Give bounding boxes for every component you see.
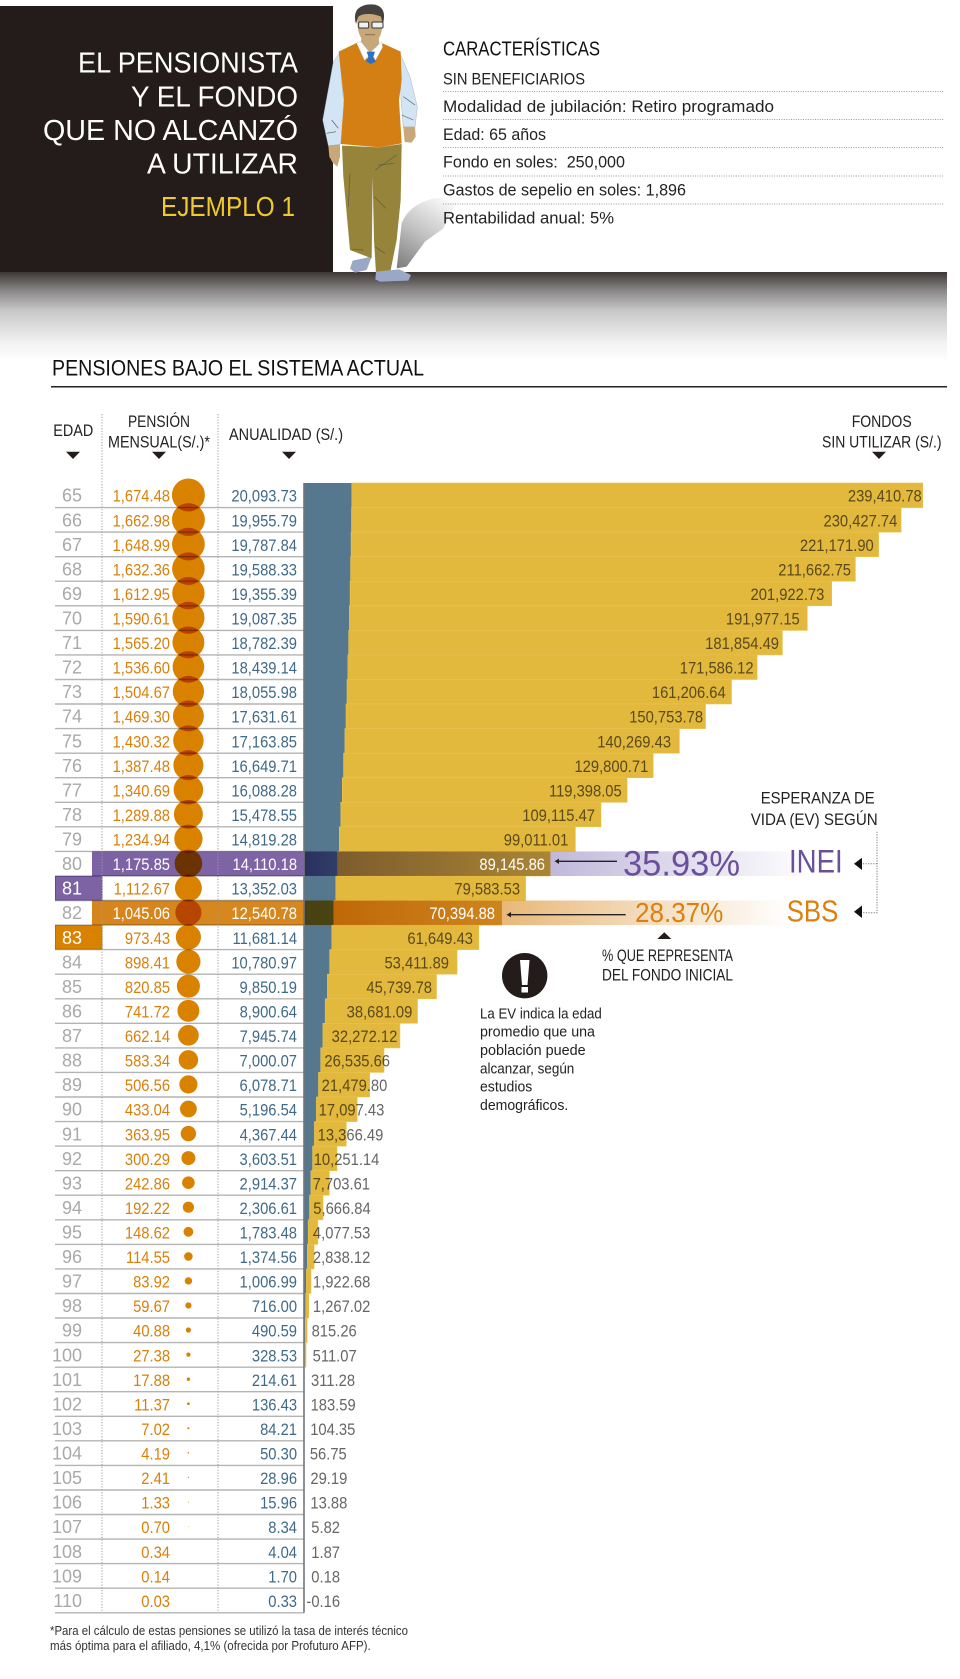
callout: SBS	[506, 894, 862, 929]
column: pensión mensual: 27.38	[133, 1348, 170, 1366]
column: pensión mensual: 1,674.48	[113, 488, 170, 506]
column: pensión mensual: 1,565.20	[113, 635, 170, 653]
column: edad: 86	[62, 1002, 82, 1022]
column: anualidad: 13,352.03	[231, 881, 297, 899]
icon: left triangle INEI	[854, 858, 862, 870]
column: edad: 100	[52, 1345, 82, 1365]
note: percent of initial fund: % QUE REPRESENTA	[602, 947, 733, 965]
column: fondos sin utilizar: 61,649.43	[407, 930, 473, 948]
column: edad: 94	[62, 1198, 82, 1218]
column: fondos sin utilizar: 89,145.86	[479, 856, 545, 874]
column: fondos sin utilizar: 32,272.12	[332, 1028, 397, 1046]
column: anualidad: 2,914.37	[240, 1176, 297, 1194]
column: anualidad: 19,787.84	[231, 537, 297, 555]
label: INEI: INEI	[789, 844, 843, 880]
column: edad: 66	[62, 510, 82, 530]
heading: title line 4: A UTILIZAR	[147, 148, 298, 180]
text: life expectancy note: promedio que una	[480, 1025, 596, 1041]
column: fondos sin utilizar: 5,666.84	[313, 1200, 371, 1218]
column: fondos sin utilizar: 4,077.53	[313, 1225, 371, 1243]
column: fondos sin utilizar: 29.19	[310, 1470, 347, 1488]
text: modalidad: Modalidad de jubilación: Retiro programado	[443, 97, 774, 116]
column: edad: 72	[62, 658, 82, 678]
column: anualidad: 14,110.18	[233, 856, 297, 874]
text: life expectancy note: población puede	[480, 1043, 586, 1059]
header: fondos sin utilizar	[822, 413, 942, 459]
column: fondos sin utilizar: 99,011.01	[504, 832, 568, 850]
column: fondos sin utilizar: 239,410.78	[848, 488, 922, 506]
bars: anualidad (blue)	[304, 483, 352, 1392]
column: pensión mensual: 192.22	[125, 1200, 170, 1218]
column: fondos sin utilizar: 38,681.09	[347, 1004, 412, 1022]
column: fondos sin utilizar: 183.59	[311, 1397, 356, 1415]
column: anualidad: 84.21	[260, 1421, 297, 1439]
column: fondos sin utilizar: -0.16	[306, 1593, 340, 1611]
illustration: pensioner	[323, 4, 467, 282]
column: edad: 108	[52, 1542, 82, 1562]
column: fondos sin utilizar: 13.88	[310, 1495, 348, 1513]
column: edad: 103	[52, 1419, 82, 1439]
table column headers	[53, 412, 942, 459]
column: anualidad: 15.96	[260, 1495, 297, 1513]
column: fondos sin utilizar: 211,662.75	[778, 562, 851, 580]
column: pensión mensual: 7.02	[141, 1421, 170, 1439]
label: SBS: SBS	[787, 894, 838, 929]
column: fondos sin utilizar: 56.75	[310, 1446, 347, 1464]
column: anualidad: 7,945.74	[240, 1028, 297, 1046]
column: fondos sin utilizar: 109,115.47	[522, 807, 595, 825]
column: fondos sin utilizar	[306, 488, 922, 1611]
column: anualidad: 9,850.19	[240, 979, 297, 997]
column: anualidad: 716.00	[252, 1299, 297, 1316]
text: gastos: Gastos de sepelio en soles: 1,896	[443, 181, 686, 200]
column: edad: 110	[53, 1591, 82, 1611]
column: edad: 79	[62, 830, 82, 850]
column: edad: 75	[62, 731, 82, 751]
column: anualidad: 19,955.79	[231, 513, 297, 531]
highlight box: age 83	[56, 926, 102, 949]
percentage: 28.37%: 28.37%	[635, 897, 723, 928]
column: fondos sin utilizar: 2,838.12	[313, 1249, 370, 1267]
column: edad: 96	[62, 1247, 82, 1267]
column: fondos sin utilizar: 79,583.53	[454, 881, 520, 899]
column: fondos sin utilizar: 129,800.71	[574, 758, 648, 776]
header: fondos sin utilizar: FONDOS	[852, 413, 912, 431]
column: edad: 73	[62, 682, 82, 702]
column: fondos sin utilizar: 815.26	[312, 1323, 357, 1341]
column: fondos sin utilizar: 201,922.73	[751, 586, 825, 604]
column: pensión mensual: 59.67	[133, 1299, 170, 1316]
column: edad	[52, 486, 82, 1611]
column: edad: 80	[62, 854, 82, 874]
column: pensión mensual: 1,112.67	[114, 881, 170, 899]
icon: left triangle SBS	[854, 906, 862, 918]
column: fondos sin utilizar: 104.35	[310, 1421, 356, 1439]
text: life expectancy note: alcanzar, según	[480, 1061, 574, 1077]
column: anualidad: 18,782.39	[231, 635, 297, 653]
column: anualidad: 328.53	[252, 1348, 297, 1366]
column: pensión mensual: 1,387.48	[113, 758, 170, 776]
column: anualidad: 16,088.28	[231, 783, 297, 801]
column: pensión mensual: 820.85	[125, 979, 170, 997]
highlight band: SBS row 82	[92, 900, 790, 925]
column: pensión mensual: 506.56	[125, 1077, 170, 1095]
text: fondo: Fondo en soles: 250,000	[443, 153, 625, 172]
column: pensión mensual: 1,469.30	[113, 709, 170, 727]
column: pensión mensual: 1.33	[141, 1495, 170, 1513]
column: pensión mensual	[113, 488, 170, 1611]
highlight box: age 81	[56, 876, 102, 900]
panel: characteristics	[443, 38, 944, 227]
text: life expectancy note: demográficos.	[480, 1098, 568, 1114]
column: pensión mensual: 363.95	[125, 1127, 170, 1145]
column: fondos sin utilizar: 161,206.64	[652, 685, 726, 702]
bars: fondos sin utilizar (yellow)	[305, 483, 923, 1367]
column: edad: 107	[52, 1517, 82, 1537]
column: pensión mensual: 973.43	[125, 930, 170, 948]
column: anualidad: 18,439.14	[231, 660, 297, 678]
callout: INEI	[554, 844, 862, 883]
column: pensión mensual: 4.19	[141, 1446, 170, 1464]
callout: esperanza de vida heading: ESPERANZA DE	[761, 788, 875, 807]
heading: pensiones bajo el sistema actual: PENSIONES BAJO EL SISTEMA ACTUAL	[52, 356, 424, 381]
column: edad: 92	[62, 1149, 82, 1169]
callout: esperanza de vida heading: VIDA (EV) SEGÚN	[751, 810, 878, 829]
column: anualidad: 136.43	[252, 1397, 297, 1415]
column: pension bubbles	[172, 478, 205, 1527]
highlight band: INEI row 80	[92, 851, 813, 876]
column: fondos sin utilizar: 17,097.43	[319, 1102, 385, 1120]
footnote	[50, 1624, 408, 1653]
column: edad: 87	[62, 1026, 82, 1046]
column: anualidad: 5,196.54	[240, 1102, 297, 1120]
column: pensión mensual: 741.72	[125, 1004, 170, 1022]
column: edad: 68	[62, 559, 82, 579]
column: anualidad: 15,478.55	[231, 807, 297, 825]
column: edad: 97	[62, 1272, 82, 1292]
header: pensión mensual: PENSIÓN	[128, 412, 190, 431]
column: pensión mensual: 0.34	[141, 1544, 170, 1562]
column: edad: 76	[62, 756, 82, 776]
column: fondos sin utilizar: 511.07	[313, 1348, 357, 1366]
column: pensión mensual: 1,175.85	[113, 856, 170, 874]
column: pensión mensual: 1,430.32	[113, 734, 170, 752]
column: anualidad: 6,078.71	[240, 1077, 297, 1095]
column: edad: 98	[62, 1296, 82, 1316]
column: pensión mensual: 0.03	[141, 1593, 170, 1611]
column: pensión mensual: 1,632.36	[113, 562, 170, 580]
column: anualidad: 19,588.33	[231, 562, 297, 580]
panel: title	[0, 6, 333, 272]
column: pensión mensual: 242.86	[125, 1176, 170, 1194]
column: pensión mensual: 1,590.61	[113, 611, 170, 629]
column: fondos sin utilizar: 171,586.12	[680, 660, 754, 678]
column: fondos sin utilizar: 45,739.78	[366, 979, 432, 997]
column: edad: 101	[52, 1370, 82, 1390]
column: pensión mensual: 662.14	[125, 1028, 170, 1046]
column: fondos sin utilizar: 191,977.15	[726, 611, 800, 629]
column: fondos sin utilizar: 1.87	[311, 1544, 340, 1562]
column: fondos sin utilizar: 221,171.90	[800, 537, 874, 555]
column: fondos sin utilizar: 150,753.78	[629, 709, 703, 727]
column: anualidad: 17,163.85	[231, 734, 297, 752]
column: edad: 67	[62, 535, 82, 555]
column: anualidad: 1.70	[268, 1569, 297, 1587]
column: edad: 71	[62, 633, 82, 653]
column: pensión mensual: 0.14	[141, 1569, 170, 1587]
column: edad: 65	[62, 486, 82, 506]
column: anualidad: 2,306.61	[240, 1200, 297, 1218]
column: edad: 99	[62, 1321, 82, 1341]
column: anualidad: 14,819.28	[231, 832, 297, 850]
column: pensión mensual: 1,234.94	[113, 832, 170, 850]
column: fondos sin utilizar: 1,267.02	[313, 1299, 370, 1316]
column: anualidad: 4.04	[268, 1544, 297, 1562]
chart: stacked bars annuity and unused funds	[304, 483, 923, 1392]
column: fondos sin utilizar: 70,394.88	[429, 906, 495, 923]
column: edad: 89	[62, 1075, 82, 1095]
column: edad: 85	[62, 977, 82, 997]
column: pensión mensual: 0.70	[141, 1520, 170, 1537]
column: anualidad: 19,087.35	[231, 611, 297, 629]
column: fondos sin utilizar: 311.28	[311, 1372, 355, 1390]
column: edad: 106	[52, 1493, 82, 1513]
column: edad: 83	[62, 928, 82, 948]
footnote: *Para el cálculo de estas pensiones se utilizó la tasa de interés técnico	[50, 1624, 408, 1638]
column: anualidad: 17,631.61	[231, 709, 297, 727]
gradient floor band	[0, 272, 947, 362]
callout: esperanza de vida heading	[751, 788, 878, 829]
column: pensión mensual: 1,289.88	[113, 807, 170, 825]
column: pensión mensual: 40.88	[133, 1323, 170, 1341]
column: pensión mensual: 148.62	[125, 1225, 170, 1243]
column: anualidad: 0.33	[268, 1593, 297, 1611]
column: pensión mensual: 114.55	[126, 1249, 170, 1267]
text: life expectancy note: La EV indica la edad	[480, 1006, 602, 1022]
column: edad: 74	[62, 707, 82, 727]
column: fondos sin utilizar: 10,251.14	[314, 1151, 380, 1169]
note: percent of initial fund	[602, 932, 733, 985]
column: pensión mensual: 83.92	[133, 1274, 170, 1292]
text: rentabilidad: Rentabilidad anual: 5%	[443, 208, 614, 227]
footnote: más óptima para el afiliado, 4,1% (ofrecida por Profuturo AFP).	[50, 1639, 371, 1653]
column: anualidad	[231, 488, 297, 1611]
column: edad: 102	[52, 1394, 82, 1414]
column: fondos sin utilizar: 53,411.89	[384, 955, 449, 973]
column: anualidad: 1,006.99	[240, 1274, 297, 1292]
header: pensión mensual	[108, 412, 210, 459]
column: pensión mensual: 583.34	[125, 1053, 170, 1071]
percentage: 35.93%: 35.93%	[623, 844, 740, 883]
column: edad: 70	[62, 608, 82, 628]
column: edad: 104	[52, 1444, 82, 1464]
column: fondos sin utilizar: 0.18	[311, 1569, 340, 1587]
column: pensión mensual: 300.29	[125, 1151, 170, 1169]
column: anualidad: 18,055.98	[231, 685, 297, 702]
column: edad: 84	[62, 952, 82, 972]
column: fondos sin utilizar: 26,535.66	[324, 1053, 390, 1071]
column: edad: 90	[62, 1100, 82, 1120]
column: edad: 88	[62, 1051, 82, 1071]
column: edad: 69	[62, 584, 82, 604]
column: fondos sin utilizar: 1,922.68	[313, 1274, 371, 1292]
column: pensión mensual: 2.41	[141, 1470, 170, 1488]
column: edad: 78	[62, 805, 82, 825]
header: fondos sin utilizar: SIN UTILIZAR (S/.)	[822, 434, 942, 452]
header: anualidad: ANUALIDAD (S/.)	[229, 426, 343, 444]
column: pensión mensual: 1,045.06	[113, 906, 170, 923]
column: pensión mensual: 1,662.98	[113, 513, 170, 531]
column: pensión mensual: 433.04	[125, 1102, 170, 1120]
icon: exclamation	[502, 953, 547, 998]
header: edad: EDAD	[53, 422, 93, 440]
text: edad: Edad: 65 años	[443, 125, 546, 144]
column: edad: 95	[62, 1222, 82, 1242]
column: anualidad: 4,367.44	[240, 1127, 297, 1145]
column: pensión mensual: 17.88	[133, 1372, 170, 1390]
column: fondos sin utilizar: 181,854.49	[705, 635, 779, 653]
column: anualidad: 1,783.48	[240, 1225, 297, 1243]
text: sin beneficiarios: SIN BENEFICIARIOS	[443, 69, 585, 88]
column: edad: 93	[62, 1173, 82, 1193]
text: life expectancy note	[480, 1006, 602, 1114]
bracket connector	[862, 832, 877, 913]
column: fondos sin utilizar: 230,427.74	[824, 513, 898, 531]
column: anualidad: 12,540.78	[231, 906, 297, 923]
column: edad: 105	[52, 1468, 82, 1488]
column: pensión mensual: 11.37	[134, 1397, 170, 1415]
column: anualidad: 19,355.39	[231, 586, 297, 604]
column: edad: 109	[52, 1566, 82, 1586]
column: anualidad: 20,093.73	[231, 488, 297, 506]
column: anualidad: 8,900.64	[240, 1004, 297, 1022]
column: anualidad: 10,780.97	[231, 955, 297, 973]
column: anualidad: 214.61	[252, 1372, 297, 1390]
column: anualidad: 7,000.07	[240, 1053, 297, 1071]
column: anualidad: 3,603.51	[240, 1151, 297, 1169]
column: fondos sin utilizar: 119,398.05	[549, 783, 622, 801]
column: edad: 91	[62, 1124, 82, 1144]
column: pensión mensual: 1,648.99	[113, 537, 170, 555]
column: fondos sin utilizar: 13,366.49	[318, 1127, 383, 1145]
column: fondos sin utilizar: 21,479.80	[322, 1077, 388, 1095]
column: anualidad: 490.59	[252, 1323, 297, 1341]
arrow: INEI to fund value	[554, 859, 617, 864]
subtitle: example: EJEMPLO 1	[161, 191, 295, 222]
column: anualidad: 50.30	[260, 1446, 297, 1464]
column: fondos sin utilizar: 5.82	[311, 1520, 340, 1537]
column: edad: 82	[62, 903, 82, 923]
heading: características: CARACTERÍSTICAS	[443, 38, 600, 61]
column: anualidad: 1,374.56	[240, 1249, 297, 1267]
column: anualidad: 11,681.14	[233, 930, 297, 948]
column: fondos sin utilizar: 140,269.43	[597, 734, 671, 752]
heading: title line 3: QUE NO ALCANZÓ	[43, 114, 298, 147]
column: pensión mensual: 1,504.67	[113, 685, 170, 702]
column: pensión mensual: 1,340.69	[113, 783, 170, 801]
column: pensión mensual: 1,536.60	[113, 660, 170, 678]
arrow: SBS to fund value	[506, 912, 626, 917]
column: fondos sin utilizar: 7,703.61	[313, 1176, 370, 1194]
column: pensión mensual: 1,612.95	[113, 586, 170, 604]
text: life expectancy note: estudios	[480, 1080, 532, 1096]
heading: title line 1: EL PENSIONISTA	[78, 48, 299, 80]
note: percent of initial fund: DEL FONDO INICIAL	[602, 967, 733, 985]
column: anualidad: 8.34	[268, 1520, 297, 1537]
header: anualidad	[229, 426, 343, 459]
column: pensión mensual: 898.41	[125, 955, 170, 973]
column: edad: 77	[62, 780, 82, 800]
heading: title line 2: Y EL FONDO	[131, 81, 298, 113]
column: edad: 81	[62, 879, 82, 899]
column: anualidad: 16,649.71	[231, 758, 297, 776]
column: anualidad: 28.96	[260, 1470, 297, 1488]
header: pensión mensual: MENSUAL(S/.)*	[108, 434, 210, 452]
header: edad	[53, 422, 93, 459]
